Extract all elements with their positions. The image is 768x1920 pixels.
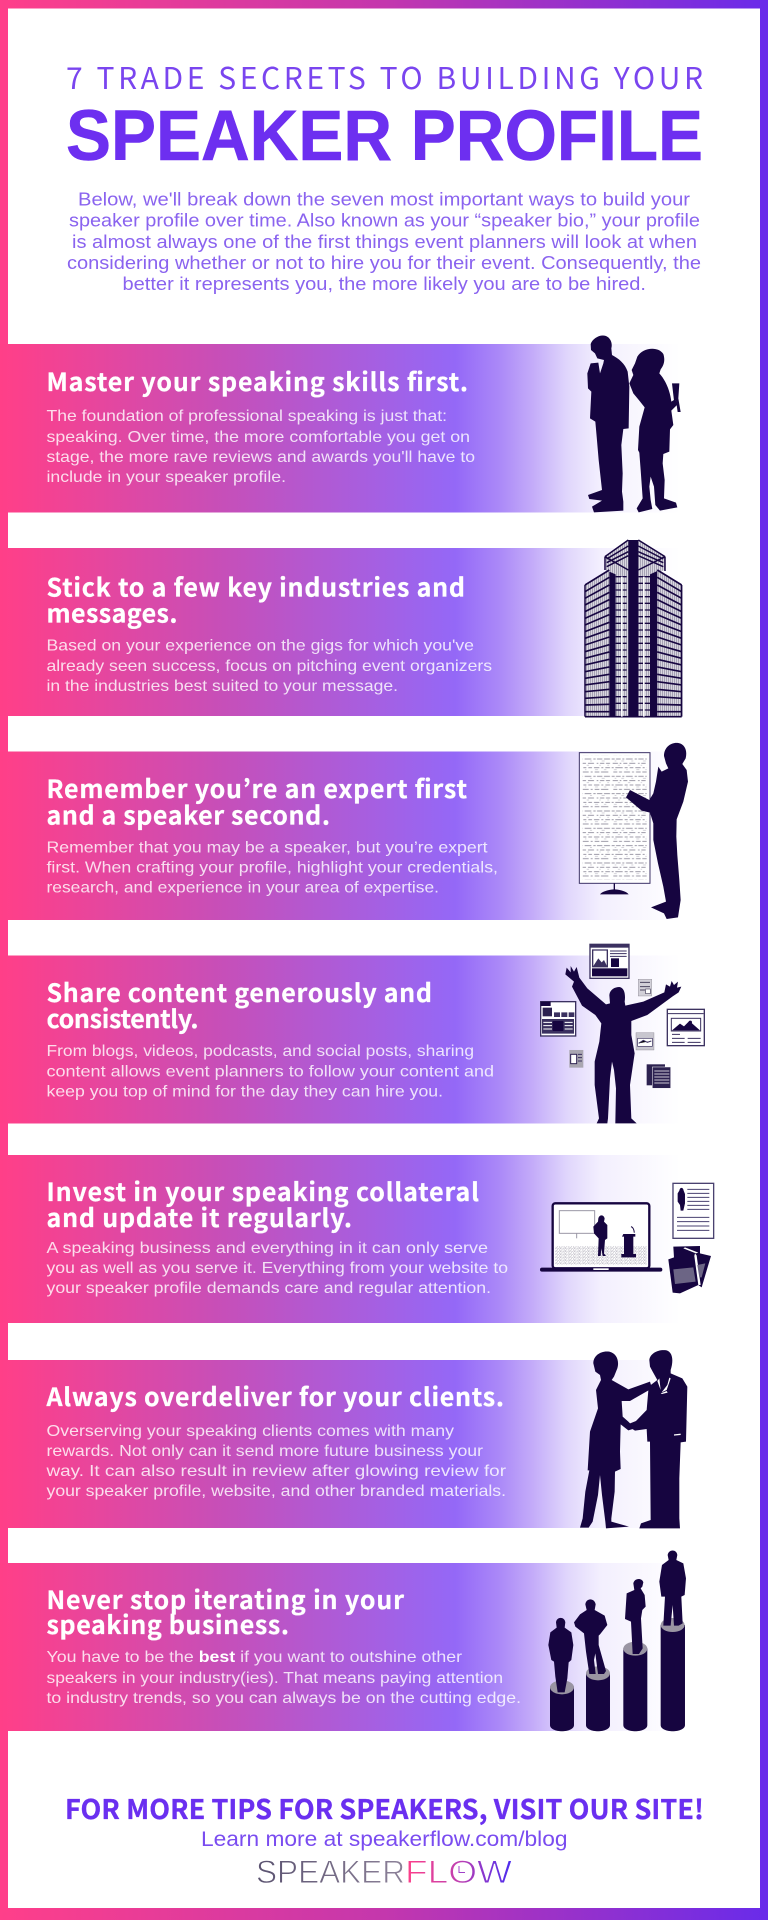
body: iterating: You have to be the best if you want to outshine other — [46, 1649, 462, 1666]
body: collateral: you as well as you serve it. Everything from your website to — [46, 1260, 508, 1277]
intro text: speaker profile over time. Also known as your “speaker bio,” your profile — [69, 210, 700, 230]
body: master — [46, 408, 475, 486]
heading: share — [46, 974, 432, 1036]
heading: expert: and a speaker second. — [46, 797, 330, 833]
intro text: Below, we'll break down the seven most important ways to build your — [78, 188, 690, 210]
logo: SpeakerFlow: FLOW — [405, 1854, 512, 1890]
icon: two speakers back to back — [587, 336, 681, 512]
icon: figures on rising columns — [548, 1550, 686, 1731]
logo: SpeakerFlow — [256, 1854, 512, 1890]
body: industries: already seen success, focus on pitching event organizers — [46, 658, 492, 675]
panel: expert first — [0, 743, 688, 920]
body: share: keep you top of mind for the day they can hire you. — [46, 1084, 443, 1101]
heading: industries — [46, 569, 465, 631]
heading: expert: Remember you’re an expert first — [46, 770, 467, 806]
body: overdeliver — [45, 1423, 506, 1500]
heading: collateral — [46, 1173, 479, 1235]
body: master: The foundation of professional speaking is just that: — [46, 408, 447, 425]
panel: stick to key industries — [0, 540, 682, 717]
heading: share: Share content generously and — [46, 974, 432, 1010]
body: overdeliver: way. It can also result in review after glowing review for — [45, 1463, 506, 1480]
heading: overdeliver: Always overdeliver for your clients. — [46, 1378, 504, 1414]
body: master: include in your speaker profile. — [46, 469, 286, 486]
body: expert — [46, 839, 498, 897]
body: industries: Based on your experience on the gigs for which you've — [46, 638, 474, 655]
panel: share content — [0, 944, 704, 1124]
body: industries — [46, 638, 492, 695]
body: overdeliver: your speaker profile, website, and other branded materials. — [46, 1483, 506, 1500]
panel: never stop iterating — [0, 1550, 686, 1731]
icon: two people shaking hands — [580, 1350, 687, 1528]
heading: collateral: Invest in your speaking collateral — [46, 1173, 479, 1209]
body: master: speaking. Over time, the more comfortable you get on — [46, 429, 470, 446]
heading: master: Master your speaking skills first. — [46, 363, 468, 399]
title: SPEAKER PROFILE — [66, 97, 703, 176]
intro text: considering whether or not to hire you for their event. Consequently, the — [67, 252, 701, 273]
body: overdeliver: Overserving your speaking clients comes with many — [46, 1423, 454, 1440]
body: share: content allows event planners to follow your content and — [46, 1064, 494, 1080]
body: iterating: to industry trends, so you can always be on the cutting edge. — [46, 1690, 521, 1707]
call to action heading: FOR MORE TIPS FOR SPEAKERS, VISIT OUR SITE! — [65, 1788, 704, 1827]
intro text: is almost always one of the first things event planners will look at when — [72, 231, 697, 252]
heading: iterating — [46, 1581, 404, 1642]
icon: office tower — [585, 540, 682, 717]
icon: expert with document board — [579, 743, 688, 919]
body: master: stage, the more rave reviews and awards you'll have to — [46, 449, 475, 466]
body: expert: Remember that you may be a speaker, but you’re expert — [46, 839, 488, 856]
icon: laptop and documents — [540, 1183, 714, 1293]
body: collateral: A speaking business and everything in it can only serve — [46, 1240, 488, 1257]
heading: industries: messages. — [46, 595, 178, 631]
intro text: better it represents you, the more likely you are to be hired. — [122, 273, 646, 294]
call to action link: Learn more at speakerflow.com/blog — [201, 1828, 568, 1851]
body: expert: first. When crafting your profile, highlight your credentials, — [46, 860, 498, 877]
panel: overdeliver — [0, 1350, 687, 1528]
body: iterating — [46, 1649, 521, 1707]
panel: speaking collateral — [0, 1155, 714, 1323]
panel: master your speaking skills — [0, 336, 681, 512]
body: industries: in the industries best suited to your message. — [46, 678, 398, 695]
body: share: From blogs, videos, podcasts, and social posts, sharing — [46, 1043, 474, 1060]
heading: industries: Stick to a few key industries and — [46, 569, 465, 605]
body: share — [46, 1043, 494, 1101]
body: collateral: your speaker profile demands care and regular attention. — [46, 1280, 491, 1297]
heading: collateral: and update it regularly. — [46, 1199, 352, 1235]
body: collateral — [46, 1240, 508, 1297]
heading: iterating: speaking business. — [46, 1606, 289, 1642]
heading: iterating: Never stop iterating in your — [46, 1581, 404, 1617]
title: 7 TRADE SECRETS TO BUILDING YOUR — [66, 54, 703, 98]
icon: person surrounded by content — [541, 944, 704, 1123]
heading: share: consistently. — [46, 1000, 198, 1036]
heading: expert — [46, 770, 467, 833]
intro text — [67, 188, 701, 294]
body: iterating: speakers in your industry(ies). That means paying attention — [46, 1670, 503, 1687]
logo: SpeakerFlow: SPEAKER — [256, 1854, 405, 1890]
title — [66, 54, 703, 176]
body: overdeliver: rewards. Not only can it send more future business your — [46, 1443, 483, 1460]
body: expert: research, and experience in your area of expertise. — [46, 880, 439, 897]
